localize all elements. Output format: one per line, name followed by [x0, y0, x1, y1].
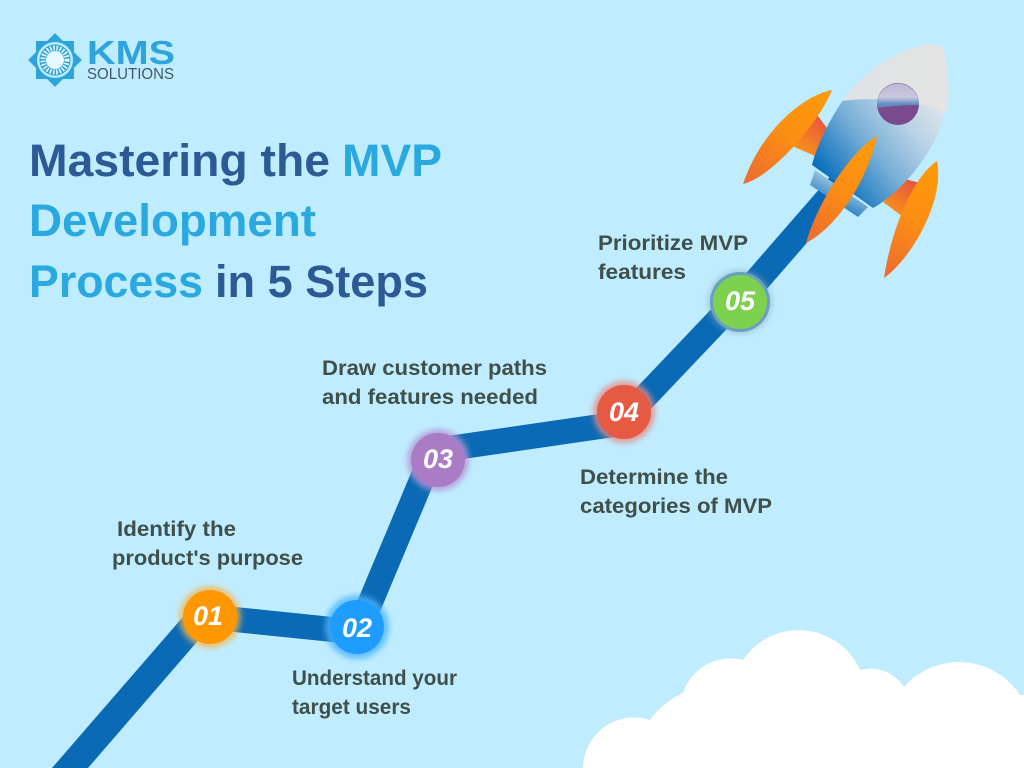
label: step 02: Understand your	[292, 667, 457, 690]
left fin	[743, 90, 832, 184]
logo wordmark: KMS	[87, 34, 175, 71]
title	[29, 135, 442, 307]
right fin connector	[883, 179, 920, 222]
nozzle	[810, 170, 868, 217]
growth path line	[52, 185, 840, 768]
title: in 5 Steps	[215, 256, 428, 307]
rocket body	[812, 44, 947, 208]
step 04: 04	[609, 397, 639, 427]
label: step 01	[112, 518, 303, 570]
label: step 05: features	[598, 261, 686, 284]
label: step 05	[598, 232, 748, 284]
step 04	[593, 381, 655, 443]
label: step 03: Draw customer paths	[322, 357, 547, 380]
title: Mastering the	[29, 135, 330, 186]
label: step 04	[580, 466, 772, 518]
step 03: 03	[423, 444, 453, 474]
label: step 05: Prioritize MVP	[598, 232, 748, 255]
step 01	[179, 586, 241, 648]
step 03	[407, 429, 469, 491]
label: step 03	[322, 357, 547, 409]
label: step 02: target users	[292, 696, 411, 719]
logo subtitle: SOLUTIONS	[87, 66, 174, 83]
step 05: 05	[725, 286, 756, 316]
label: step 03: and features needed	[322, 386, 538, 409]
left fin connector	[792, 116, 827, 156]
title: MVP	[342, 135, 442, 186]
step 02	[325, 595, 389, 659]
title: Process	[29, 256, 203, 307]
label: step 04: Determine the	[580, 466, 728, 489]
title: Development	[29, 195, 316, 246]
label: step 04: categories of MVP	[580, 495, 772, 518]
label: step 02	[292, 667, 457, 719]
label: step 01: product's purpose	[112, 547, 303, 570]
rocket nose	[842, 44, 948, 112]
right fin	[884, 161, 938, 278]
step 05	[708, 270, 772, 334]
label: step 01: Identify the	[117, 518, 236, 541]
cloud	[583, 630, 1024, 768]
center fin	[806, 136, 877, 243]
logo emblem	[28, 33, 82, 87]
window	[877, 83, 919, 125]
rocket	[743, 44, 948, 278]
step 01: 01	[193, 601, 223, 631]
step 02: 02	[342, 613, 372, 643]
logo: KMS Solutions	[28, 33, 175, 87]
